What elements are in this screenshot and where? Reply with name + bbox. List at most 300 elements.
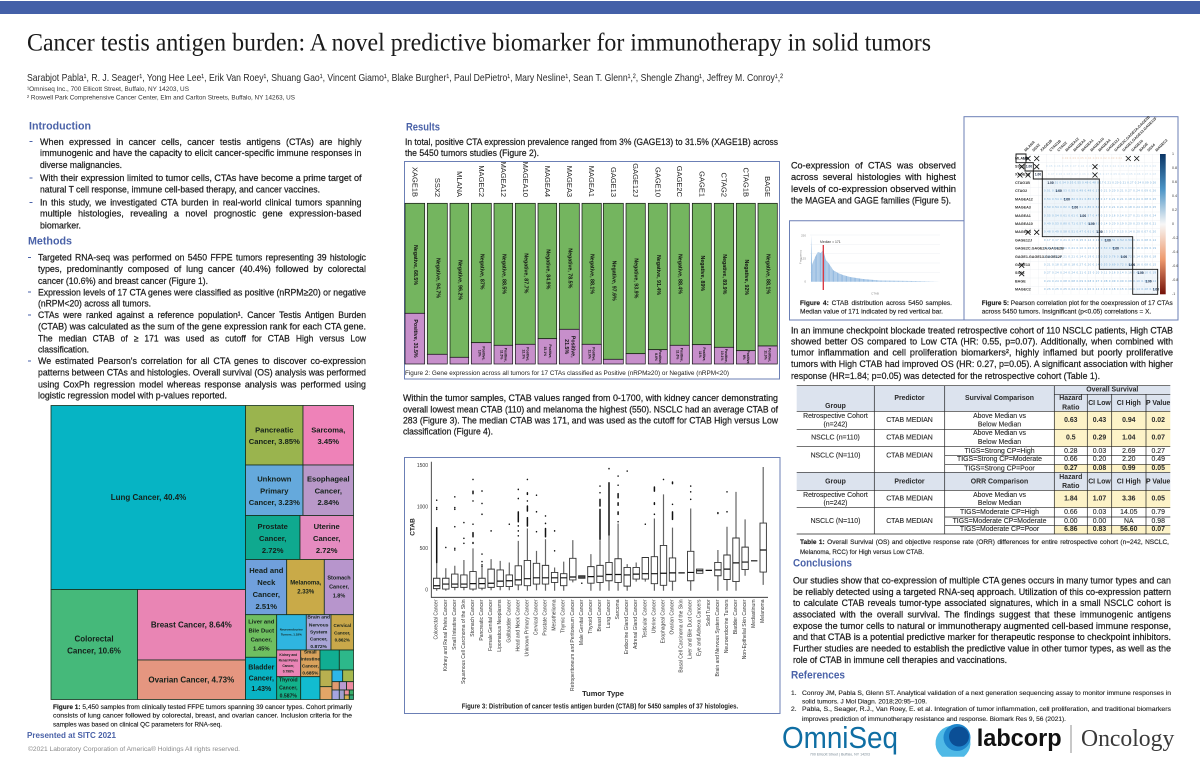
row labels: SSX2 (1015, 164, 1024, 168)
header bar (0, 1, 1200, 14)
table row: retrospective OS: Above Median vs (973, 413, 1026, 420)
table row: retrospective ORR: 1.84 (1064, 496, 1078, 502)
axes (431, 462, 768, 597)
text block: co-expression: across several histologies with highest (791, 171, 956, 182)
table row: retrospective OS: 0.43 (1093, 417, 1106, 424)
whiskers (437, 467, 763, 591)
colour bar: -0.6 (1172, 264, 1178, 268)
gene labels: MAGEA3 (565, 166, 574, 197)
x axis labels: Basal Cell Carcinoma of the Skin (679, 599, 685, 673)
affiliations: ² Roswell Park Comprehensive Cancer Center, Elm and Carlton Streets, Buffalo, NY 14263, US (27, 94, 295, 102)
negative labels: Negative, 89.9% (721, 254, 727, 295)
positive labels: Positive, (503, 348, 507, 362)
table header: survival: Group (825, 403, 846, 410)
gene labels: GAGE2C (675, 166, 684, 198)
histogram axis labels: CTAB (871, 292, 879, 296)
top labels: MAGEA1 (1081, 138, 1095, 152)
table rows: TIGS strong: TIGS=Strong CP=High (964, 448, 1035, 455)
diagonal values: 1.00 (1137, 271, 1144, 275)
text block: methods: CTAs were ranked against a reference population¹. Cancer Testis Antigen Burden (38, 309, 366, 320)
logo: OmniSeq: 700 Ellicott Street | Buffalo, NY 14203 (810, 752, 870, 756)
top labels: SSX2 (1032, 143, 1041, 152)
correlation values: 0.21 0.18 0.18 0.18 0.27 0.20 0.14 0.53 0.69 0.72 0.80 0.16 0.08 0.15 (1044, 262, 1156, 266)
positive labels (412, 319, 772, 364)
row labels (1015, 156, 1064, 292)
panel: figure 3 box plot (404, 458, 780, 714)
cell: melanoma: Melanoma, (290, 580, 322, 586)
cell: breast cancer: Breast Cancer, 8.64% (151, 620, 232, 630)
top labels: BAGE (1139, 142, 1149, 152)
y axis title: CTAB (410, 518, 416, 536)
table rows: TIGS strong: 0.27 (1064, 465, 1078, 472)
logo: Oncology: Oncology (1081, 726, 1174, 752)
cell: small intestine cancer: 0.685% (302, 670, 319, 675)
cell: kidney and renal pelvis cancer (277, 650, 301, 677)
x axis labels: Neuroendocrine Tumors (724, 599, 730, 653)
text block: conclusions: to calculate CTAB reveals tumor-type associated signatures, which in a small NSCLC cohort is (793, 597, 1171, 608)
text block: NSCLC cohort: In an immune checkpoint blockade treated retrospective cohort of 110 NSCLC patients, High CTAB (791, 324, 1173, 336)
cell: uterine cancer: 2.72% (316, 546, 338, 554)
table row: retrospective OS: CTAB MEDIAN (886, 417, 933, 424)
positive labels: Positive, (481, 346, 485, 360)
positive labels: 12.3% (521, 349, 525, 359)
table row: NSCLC OS: Below Median (978, 439, 1021, 446)
colour bar: 0 (1172, 222, 1174, 226)
text block: NSCLC cohort: tumor inflammation and cell proliferation biomarkers², highly inflamed but poorly proliferative (791, 346, 1173, 358)
negative segments (405, 203, 777, 359)
cell: cervical cancer: Cancer, (334, 630, 350, 635)
text block: co-expression (791, 160, 956, 206)
table rows: TIGS strong: 0.27 (1151, 448, 1165, 455)
x axis labels: Kidney and Renal Pelvis Cancer (443, 599, 449, 671)
cell: cervical cancer (331, 615, 354, 650)
cell: sarcoma: Sarcoma, (311, 425, 345, 434)
cell: esophageal cancer: Cancer, (315, 486, 342, 495)
table header: response (825, 474, 1171, 490)
references list: solid tumors. J Mol Diagn. 2018;20:95–109. (802, 698, 927, 706)
x axis labels: Non-Epithelial Skin Cancer (742, 599, 748, 659)
colour bar: 0.6 (1172, 180, 1177, 184)
table row: retrospective OS: (n=242) (824, 422, 847, 428)
diagonal values: 1.00 (1153, 288, 1159, 292)
text block: methods: (CTAB) was calculated as the sum of the gene expression rank for each CTA gene. (38, 320, 366, 332)
negative labels (412, 245, 771, 301)
table rows: TIGS moderate: 0.00 (1064, 518, 1078, 525)
cell: stomach cancer: Stomach (327, 576, 351, 582)
gene labels: GAGE10 (653, 167, 662, 197)
table row: retrospective ORR: Retrospective Cohort (803, 492, 868, 499)
text block: methods: We estimated Pearson's correlation for all CTA genes to discover co-expression (38, 355, 366, 366)
histogram grid (810, 235, 940, 272)
cell: head and neck cancer: 2.51% (256, 602, 277, 610)
cell: head and neck cancer: Cancer, (253, 590, 280, 598)
references list (791, 690, 1172, 723)
top labels: MLANA (1024, 140, 1036, 152)
affiliations (27, 86, 295, 102)
text block: results intro (405, 136, 778, 158)
histogram axis labels: Frequency (799, 249, 803, 264)
text block: methods: classification. (38, 344, 89, 354)
gene labels: BAGE (763, 176, 772, 197)
x axis labels: Sarcoma (615, 599, 621, 620)
row labels: MAGEA10 (1015, 222, 1033, 226)
logo: OmniSeq: OmniSeq (782, 720, 898, 755)
text block: introduction: natural T cell response, immune cell-based therapy, and cancer vaccines. (40, 184, 320, 194)
top labels: MAGEA3 (1073, 138, 1087, 152)
table rows: TIGS moderate: 0.03 (1093, 509, 1106, 516)
top labels: CTAG1B (1049, 139, 1062, 152)
table rows: TIGS moderate: 0.00 (1093, 518, 1106, 525)
top labels: GAGE10 (1131, 139, 1144, 152)
cell: ovarian cancer: Ovarian Cancer, 4.73% (148, 676, 234, 684)
table rows: TIGS strong: 0.03 (1093, 448, 1106, 455)
cell: small intestine cancer: Cancer, (302, 663, 319, 668)
cluster boxes (1016, 154, 1158, 294)
text block: introduction: multiple histologies, revealing a novel prognostic gene expression-based (40, 208, 362, 218)
cell: thyroid cancer: Cancer, (279, 685, 298, 691)
table row: retrospective OS (803, 413, 1165, 428)
table 1 (797, 386, 1171, 534)
positive labels: 15.1% (543, 346, 547, 356)
cell: small intestine cancer: Small (304, 649, 317, 654)
table rows: TIGS moderate: 0.66 (1064, 509, 1078, 516)
heading: Methods: Methods (28, 236, 72, 248)
gene labels (410, 162, 772, 198)
figure 1 caption (53, 704, 353, 728)
row labels: BAGE (1015, 279, 1026, 283)
negative labels: Negative, 88.1% (765, 254, 771, 294)
table rows: TIGS moderate: TIGS=Moderate CP=High (960, 509, 1039, 516)
x axis labels: Uterine Cancer (651, 599, 657, 633)
table header: response: CI High (1117, 478, 1141, 486)
row labels: GAGE2C.GAGE2A.GAGE2B (1015, 247, 1064, 251)
correlation values: 0.51 0.54 0.53 0.55 0.49 0.48 0.17 0.21 0.20 0.21 0.27 0.24 0.09 0.26 (1044, 189, 1156, 193)
table rows: TIGS moderate: 14.05 (1120, 509, 1138, 516)
text block: conclusions: and that CTAB is a potential predictive marker for therapeutic response to checkpoint inhibitors. (793, 631, 1171, 642)
table row: retrospective ORR: Above Median vs (973, 492, 1026, 499)
table row: NSCLC OS: Above Median vs (973, 430, 1026, 437)
histogram axis labels: 250 (801, 234, 806, 238)
correlation values: 0.51 0.54 0.53 0.55 0.49 0.48 0.17 0.21 0.20 0.21 0.27 0.24 0.09 0.26 (1052, 180, 1156, 184)
colour bar: 0.2 (1172, 208, 1177, 212)
gene labels: GAGE13 (609, 167, 618, 197)
x axis labels: Mediastinum (751, 600, 757, 628)
correlation values: 0.53 0.54 0.82 0.86 0.61 0.80 0.51 0.17 0.21 0.21 0.18 0.24 0.08 0.25 (1044, 205, 1156, 209)
table rows: TIGS moderate: TIGS=Moderate CP=Poor (960, 526, 1040, 533)
panel: figure 2 stacked bars (404, 162, 780, 379)
panel: figure 4 histogram (790, 221, 964, 320)
cell: brain and nervous system cancer: System (310, 629, 328, 635)
text block: methods: types, predominantly composed of lung cancer (40.4%) followed by colorectal (38, 263, 366, 274)
text block: results intro: the 5450 tumors studies (Figure 2). (405, 147, 539, 158)
x axis labels: Liver and Bile Duct Cancer (688, 599, 694, 659)
histogram axis labels (799, 234, 879, 296)
cell: head and neck cancer: Head and (249, 566, 284, 574)
figure 4 caption (800, 300, 952, 316)
gene labels: MAGEA1 (587, 166, 596, 197)
negative labels: Negative, 89% (699, 255, 705, 291)
negative labels: Negative, 97.6% (610, 261, 616, 301)
table header: survival: Predictor (894, 395, 925, 402)
figure 4 caption: Median value of 171 indicated by red vertical bar. (800, 308, 943, 316)
negative labels: Negative, 87.7% (522, 253, 528, 294)
positive labels: Positive, (680, 348, 684, 362)
negative labels: Negative, 93.9% (633, 258, 639, 299)
correlation values: 0.54 0.54 0.86 0.82 0.61 0.80 0.58 0.17 0.21 0.21 0.18 0.24 0.08 0.25 (1044, 197, 1156, 201)
cell: kidney and renal pelvis cancer: 0.798% (283, 669, 294, 673)
table rows: TIGS strong: 0.49 (1151, 456, 1165, 463)
table rows: TIGS strong: TIGS=Strong CP=Poor (964, 466, 1035, 472)
x axis labels: Colorectal Cancer (434, 599, 440, 640)
cell: sarcoma: 3.45% (318, 436, 339, 446)
diagonal values: 1.00 (1023, 156, 1029, 160)
text block: methods: cancer (10.6%) and breast cancer (Figure 1). (38, 275, 208, 286)
text block: NSCLC cohort (791, 324, 1173, 381)
text block: CTAB values (403, 392, 778, 436)
x axis labels: Unknown Primary Cancer (524, 599, 530, 656)
text block: conclusions (793, 574, 1171, 665)
cell: lung cancer (51, 406, 246, 590)
table rows: TIGS strong: NSCLC (N=110) (811, 452, 860, 460)
table row: retrospective ORR: 0.05 (1151, 496, 1165, 502)
cell: breast cancer (138, 590, 246, 660)
text block: co-expression: levels of co-expression observed within (791, 183, 956, 194)
table rows: TIGS strong: 2.69 (1122, 448, 1136, 455)
row labels: MAGEA1 (1015, 214, 1031, 218)
diagonal values: 1.00 (1129, 263, 1135, 267)
row labels: CTAG1B (1015, 181, 1030, 185)
histogram axis labels: 125 (801, 256, 806, 260)
top labels: MAGEA10 (1090, 137, 1105, 152)
x axis labels: Pancreatic Cancer (479, 599, 485, 641)
text block: introduction: diverse malignancies. (40, 159, 122, 170)
cell: esophageal cancer: Esophageal (307, 474, 350, 483)
table row: retrospective OS: 0.02 (1151, 417, 1165, 424)
table rows: TIGS moderate: 6.86 (1064, 526, 1078, 533)
text block: conclusions: be reliably detected using a targeted RNA-seq approach. Utilization of this co-expression pattern (793, 586, 1171, 597)
top labels: CTAG2 (1057, 141, 1068, 152)
x axis labels: Stomach Cancer (470, 599, 476, 637)
cell: liver and bile duct cancer (246, 615, 277, 657)
cell: ovarian cancer (138, 660, 246, 700)
cell: small intestine cancer (301, 649, 320, 677)
positive labels: 21.5% (563, 339, 569, 354)
cell: brain and nervous system cancer: Nervous (309, 622, 329, 628)
correlation values (1044, 156, 1156, 291)
row labels: MAGEA4 (1015, 230, 1032, 234)
gene labels: MAGEA10 (521, 162, 530, 197)
colour bar: -0.4 (1172, 250, 1178, 254)
table header: response: Hazard (1059, 474, 1082, 481)
cell: lung cancer: Lung Cancer, 40.4% (111, 493, 186, 502)
table row: NSCLC OS: 0.07 (1151, 434, 1165, 442)
cell: brain and nervous system cancer: Cancer, (310, 636, 328, 642)
table header: response: Ratio (1062, 483, 1079, 490)
correlation values: 0.26 0.25 0.25 0.24 0.21 0.20 0.14 0.19 0.18 0.15 0.19 0.14 0.28 0.34 (1044, 287, 1156, 291)
table rows: TIGS strong: 2.20 (1122, 456, 1136, 463)
table row: retrospective ORR: 1.07 (1093, 496, 1106, 502)
cell: unknown primary cancer: Primary (260, 486, 289, 495)
table rows: TIGS strong: 0.05 (1151, 465, 1165, 472)
table row: NSCLC OS: CTAB MEDIAN (886, 434, 933, 442)
x axis labels: Bladder Cancer (733, 599, 739, 634)
table rows: TIGS strong: 0.99 (1122, 465, 1136, 472)
correlation values: 0.03 0.03 0.05 0.04 0.03 0.02 0.03 0.02 (1062, 156, 1122, 160)
cell: cervical cancer: Cervical (334, 622, 351, 628)
positive labels: Positive, (592, 347, 596, 361)
logo: labcorp: labcorp (977, 725, 1062, 752)
y axis ticks: 1500 (417, 463, 428, 469)
table header: survival: CI High (1117, 400, 1141, 407)
table rows: TIGS moderate: NA (1124, 518, 1134, 525)
correlation values: 0.48 0.49 0.58 0.51 0.47 0.61 0.72 0.13 0.17 0.15 0.14 0.20 0.07 0.20 (1044, 230, 1156, 234)
text block: CTAB values: 283 (Figure 3). The median CTAB was 171, and was used as the cutoff for CTAB High versus Low (403, 414, 778, 426)
top labels: GAGE1.GAGE13.GAGE12F (1122, 116, 1158, 152)
median label: Median = 171 (820, 240, 841, 244)
table rules (797, 386, 1170, 534)
correlation values: 0.07 0.06 0.08 0.07 0.06 0.08 0.06 0.07 0.05 0.06 0.05 0.06 0.07 0.08 (1048, 172, 1156, 176)
top labels (1024, 115, 1169, 152)
positive labels: 11.5% (499, 350, 503, 359)
diagonal values: 1.00 (1072, 206, 1078, 210)
table row: retrospective ORR (803, 492, 1165, 507)
cell: stomach cancer: 1.8% (333, 594, 345, 600)
table rows: TIGS moderate (811, 509, 1165, 533)
text block: methods: The median CTAB of ≥ 171 was used as cutoff for CTAB High versus Low (38, 332, 366, 344)
panel: figure 5 correlation plot (964, 115, 1178, 320)
cell: cervical cancer: 0.862% (335, 637, 350, 642)
gene labels: GAGE12J (631, 163, 640, 197)
cell: sarcoma (303, 406, 354, 465)
logo: labcorp (936, 724, 1062, 757)
text block: methods (28, 252, 366, 400)
figure 1 caption: consists of lung cancer followed by colorectal, breast, and ovarian cancer. Inclusion criteria for the (53, 712, 352, 720)
correlation values: 0.21 0.21 0.21 0.21 0.16 0.20 0.17 0.53 0.86 0.76 0.69 0.16 0.09 0.19 (1044, 246, 1156, 250)
positive labels: Positive, (525, 347, 529, 361)
table rows: TIGS strong: 0.20 (1093, 456, 1106, 463)
diagonal values: 1.00 (1088, 222, 1095, 226)
gene labels: CTAG1B (741, 168, 750, 197)
x axis labels: Ovarian Cancer (670, 599, 676, 635)
cell: neuroendocrine tumors: Tumors, 1.18% (281, 633, 302, 637)
row labels: GAGE13 (1015, 263, 1030, 267)
text block: introduction: When expressed in cancer cells, cancer testis antigens (CTAs) are highly (40, 136, 362, 147)
cell: thyroid cancer: 0.587% (280, 693, 297, 699)
box plot marks (434, 467, 766, 591)
diagonal values: 1.00 (1056, 189, 1062, 193)
outliers (437, 469, 727, 583)
cell: liver and bile duct cancer: Bile Duct (249, 629, 274, 635)
text block: introduction: immunogenic and have the capacity to elicit cancer-specific immune responses in (40, 147, 362, 158)
figure 1 caption: Figure 1: 5,450 samples from clinically tested FFPE tumors spanning 39 cancer types. Cohort primarily (53, 704, 353, 711)
text block: CTAB values: Within the tumor samples, CTAB values ranged from 0-1700, with kidney cancer demonstrating (403, 392, 778, 403)
cell: unknown primary cancer (246, 465, 303, 516)
table header: survival: P Value (1146, 400, 1171, 407)
positive labels: 13% (477, 350, 481, 357)
top labels: MAGEA4 (1098, 138, 1112, 152)
text block: NSCLC cohort: response (HR=1.84; p=0.05) was detected for the retrospective cohort (Table 1). (791, 370, 1100, 381)
gene labels: MLANA (455, 171, 464, 197)
x axis labels: Esophageal Cancer (660, 599, 666, 643)
figure 2 caption: Figure 2: Gene expression across all tumors for 17 CTAs classified as Positive (nRPM≥20) or Negative (nRPM<20) (405, 370, 729, 377)
figure 5 caption: Figure 5: Pearson correlation plot for the coexpression of 17 CTAs (982, 300, 1173, 307)
references list: 2. (791, 706, 797, 713)
correlation values: 0.17 0.17 0.21 0.17 0.15 0.14 0.13 0.33 0.51 0.52 0.50 0.11 0.08 0.14 (1044, 238, 1156, 242)
cell: head and neck cancer: Neck (257, 578, 276, 586)
cell: thyroid cancer: Thyroid (279, 677, 298, 683)
text block: conclusions: Our studies show that co-expression of multiple CTA genes occurs in many tumor types and can (793, 574, 1171, 586)
text block: introduction: biomarker. (40, 220, 81, 230)
x axis labels: Lung Cancer (606, 599, 612, 628)
cell: stomach cancer: Cancer, (329, 585, 349, 591)
x axis labels (434, 599, 766, 691)
text block: CTAB values: overall lowest mean CTAB (110) and melanoma the highest (550). NSCLC had an average CTAB of (403, 404, 778, 414)
x axis labels: Thyroid Cancer (588, 599, 594, 634)
colour bar: -1 (1172, 292, 1175, 296)
table rows: TIGS strong: 0.08 (1093, 465, 1106, 472)
y axis ticks (417, 463, 428, 594)
positive segments (405, 313, 777, 364)
figure 5 caption (982, 300, 1173, 316)
text block: methods: Targeted RNA-seq was performed on 5450 FFPE tumors representing 39 histologic (38, 252, 366, 262)
cell: uterine cancer (300, 516, 354, 560)
references list: 1. (791, 690, 797, 697)
table row: retrospective OS: 0.63 (1064, 417, 1078, 424)
table rows: TIGS moderate: CTAB MEDIAN (886, 518, 933, 525)
table rows: TIGS moderate: 0.98 (1151, 518, 1165, 525)
table header: response: CI Low (1088, 478, 1111, 486)
row labels: XAGE1B (1015, 173, 1031, 177)
cell: liver and bile duct cancer: 1.45% (253, 647, 270, 653)
correlation values: 0.20 0.21 0.21 0.21 0.14 0.19 0.15 0.52 0.76 0.84 0.72 0.14 0.09 0.18 (1044, 254, 1156, 258)
table header: response: Predictor (894, 478, 925, 486)
table row: NSCLC OS (811, 430, 1165, 446)
title: Cancer testis antigen burden: A novel predictive biomarker for immunotherapy in solid tumors (27, 28, 931, 56)
presented at note: Presented at SITC 2021 (27, 731, 117, 740)
text block: methods: using CoxPh regression model whereas response analysis was performed using (38, 378, 366, 390)
row labels: MLANA (1015, 156, 1029, 160)
diagonal values: 1.00 (1105, 238, 1111, 242)
y axis ticks: 500 (420, 546, 428, 552)
histogram bars (811, 235, 940, 282)
cell: stomach cancer (324, 560, 354, 615)
figure 4 caption: Figure 4: CTAB distribution across 5450 samples. (800, 300, 952, 307)
row labels: SSX4 (1015, 271, 1025, 275)
correlation values: 0.49 0.53 0.80 0.71 0.57 0.86 0.61 0.14 0.20 0.19 0.20 0.23 0.08 0.21 (1044, 222, 1156, 226)
cell: pancreatic cancer: Cancer, 3.85% (249, 436, 300, 446)
negative labels: Negative, 94.7% (434, 258, 440, 298)
text block: conclusions: role of CTAB in immune cell therapies and vaccinations. (793, 654, 1007, 665)
heading: Results: Results (406, 122, 440, 134)
text block: NSCLC cohort: tumors with High CTAB had improved OS (HR: 0.27, p=0.05). A significant association with higher (791, 358, 1173, 369)
negative labels: Negative, 88.4% (677, 254, 683, 294)
heading: Conclusions: Conclusions (793, 558, 852, 570)
x axis labels: Breast Cancer (597, 599, 603, 631)
cell: prostate cancer: Prostate (258, 522, 288, 530)
table header: response: P Value (1146, 478, 1171, 486)
table row: retrospective OS: Below Median (978, 422, 1021, 428)
x axis labels: Small Intestine Cancer (452, 599, 458, 650)
negative labels: Negative, 96.2% (456, 260, 462, 300)
cell: liver and bile duct cancer: Cancer, (251, 638, 272, 644)
table shading (797, 386, 1170, 534)
colour bar (1160, 152, 1178, 296)
table row: retrospective ORR: Below Median (978, 500, 1021, 507)
x axis labels: Head and Neck Cancer (515, 599, 521, 651)
table rows: TIGS moderate: 0.83 (1093, 526, 1106, 533)
table row: retrospective ORR: (n=242) (824, 500, 847, 507)
treemap chart (51, 406, 354, 700)
